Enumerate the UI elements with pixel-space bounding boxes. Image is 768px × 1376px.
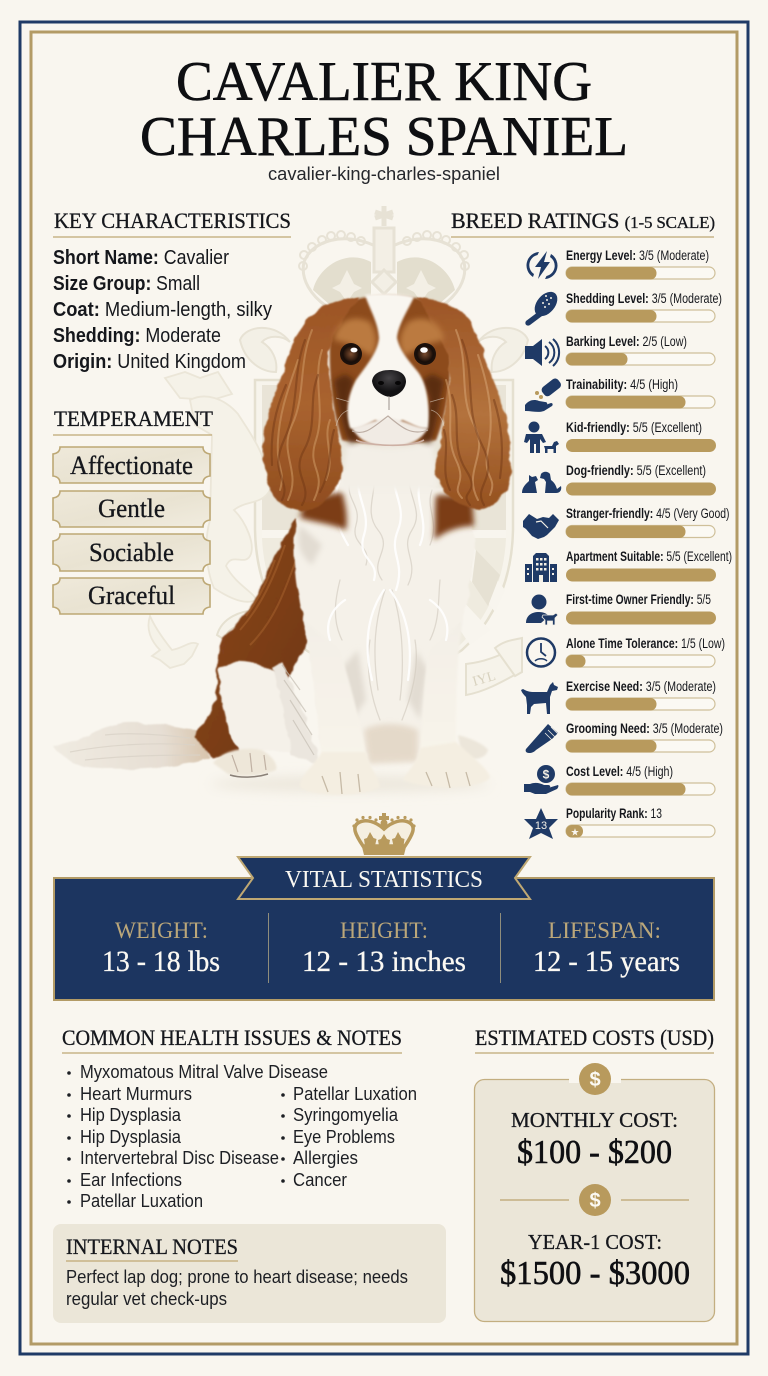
rating: first-time owner friendly: First-time Owner Friendly: 5/5 xyxy=(566,592,711,607)
icon: building xyxy=(525,553,557,582)
crest ribbon xyxy=(217,610,522,695)
panel: vital statistics xyxy=(54,857,714,1000)
plaque: affectionate xyxy=(53,447,210,483)
right rear paw xyxy=(458,735,488,759)
heading: key characteristics: KEY CHARACTERISTICS xyxy=(54,208,291,233)
health issues list: Allergies xyxy=(293,1147,358,1168)
icon: person with dog xyxy=(526,594,558,625)
rating: cost level: Cost Level: 4/5 (High) xyxy=(566,764,673,779)
rating: barking level xyxy=(525,334,715,366)
health issues list: Hip Dysplasia xyxy=(80,1126,182,1147)
health issues list: Cancer xyxy=(293,1169,347,1190)
panel: internal notes: regular vet check-ups xyxy=(66,1288,227,1309)
rating: energy level: Energy Level: 3/5 (Moderate) xyxy=(566,248,709,263)
rating: apartment suitable: Apartment Suitable: 5/5 (Excellent) xyxy=(566,549,732,564)
crest lion xyxy=(148,372,270,668)
key characteristics list xyxy=(53,247,272,373)
icon: star 13: 13 xyxy=(535,820,547,832)
title: CHARLES SPANIEL xyxy=(140,106,628,168)
ribbon banner: VITAL STATISTICS xyxy=(285,867,483,893)
wispy fur beside leg xyxy=(272,662,320,765)
body shading xyxy=(298,525,428,720)
panel: internal notes: INTERNAL NOTES xyxy=(66,1234,238,1259)
icon: star 13 xyxy=(524,808,558,839)
crest ribbon: IYL xyxy=(471,669,498,690)
rating: shedding level: Shedding Level: 3/5 (Moderate) xyxy=(566,291,722,306)
chest and body xyxy=(294,470,474,757)
icon: clock xyxy=(527,638,555,666)
icon: hand with coin xyxy=(524,765,558,794)
icon: treat bottle and hand xyxy=(525,377,563,412)
panel: internal notes xyxy=(53,1224,446,1323)
key characteristics list: Short Name: Cavalier xyxy=(53,247,229,269)
head base xyxy=(330,295,451,444)
coin divider middle xyxy=(500,1184,689,1216)
rating: popularity rank: Popularity Rank: 13 xyxy=(566,806,662,821)
health issues list: Ear Infections xyxy=(80,1169,182,1190)
key characteristics list: Shedding: Moderate xyxy=(53,325,221,347)
icon: child with dog xyxy=(524,422,559,453)
rear paw xyxy=(213,749,276,777)
plaque: gentle: Gentle xyxy=(98,494,165,523)
temperament plaques xyxy=(53,447,210,614)
rating: popularity rank xyxy=(524,806,715,839)
stat: weight: 13 - 18 lbs xyxy=(102,945,220,978)
nose xyxy=(372,370,406,397)
rating: barking level: Barking Level: 2/5 (Low) xyxy=(566,334,687,349)
rating: grooming need: Grooming Need: 3/5 (Moderate) xyxy=(566,721,723,736)
icon: comb xyxy=(526,724,558,753)
dog illustration xyxy=(53,294,511,795)
chin xyxy=(352,418,428,447)
rating: stranger-friendly: Stranger-friendly: 4/5 (Very Good) xyxy=(566,506,730,521)
icon: two dogs xyxy=(522,472,561,493)
year-1 cost: YEAR-1 COST: xyxy=(528,1230,662,1254)
health issues list xyxy=(67,1061,417,1211)
subtitle: cavalier-king-charles-spaniel xyxy=(268,164,500,184)
key characteristics list: Size Group: Small xyxy=(53,273,200,295)
health issues list: Patellar Luxation xyxy=(80,1190,203,1211)
crest flourishes xyxy=(240,328,528,372)
health issues list: Eye Problems xyxy=(293,1126,395,1147)
health issues list: Heart Murmurs xyxy=(80,1083,192,1104)
rating: exercise need xyxy=(521,679,716,714)
dark cheek shadows xyxy=(334,374,444,444)
icon: hand with coin: $ xyxy=(543,768,550,782)
brown back and rear xyxy=(194,518,320,758)
heraldic crest background xyxy=(148,206,528,700)
health issues list: Syringomyelia xyxy=(293,1104,399,1125)
plaque: sociable: Sociable xyxy=(89,538,174,567)
head xyxy=(334,294,444,447)
plaque: gentle xyxy=(53,491,210,527)
rating: cost level xyxy=(524,764,715,796)
white neck xyxy=(340,440,440,490)
rating: trainability xyxy=(525,377,715,412)
heading: breed ratings: BREED RATINGS (1-5 SCALE) xyxy=(451,208,715,233)
left front paw xyxy=(300,752,380,795)
icon: speaker xyxy=(525,339,559,366)
health issues list: Myxomatous Mitral Valve Disease xyxy=(80,1061,328,1082)
white haunch xyxy=(219,662,300,752)
ribbon banner xyxy=(238,857,530,899)
coin divider top: $ xyxy=(589,1069,601,1091)
coin divider middle: $ xyxy=(589,1190,601,1212)
heading: estimated costs: ESTIMATED COSTS (USD) xyxy=(475,1025,714,1050)
rating: energy level xyxy=(527,248,715,280)
stat: height: 12 - 13 inches xyxy=(302,945,466,978)
stat: lifespan: 12 - 15 years xyxy=(533,945,680,978)
heading: temperament: TEMPERAMENT xyxy=(54,406,214,431)
rating: dog-friendly xyxy=(522,463,716,496)
year-1 cost: $1500 - $3000 xyxy=(500,1255,690,1292)
stat: lifespan: LIFESPAN: xyxy=(548,918,661,943)
plaque: affectionate: Affectionate xyxy=(70,451,193,480)
plaque: graceful xyxy=(53,578,210,614)
breed ratings list xyxy=(521,248,732,839)
whiskers xyxy=(336,398,444,426)
left front leg xyxy=(304,620,366,758)
left ear xyxy=(263,297,360,511)
health issues list: Hip Dysplasia xyxy=(80,1104,182,1125)
stat: height xyxy=(302,918,466,978)
plaque: sociable xyxy=(53,534,210,571)
heading: common health issues: COMMON HEALTH ISSUES & NOTES xyxy=(62,1025,402,1050)
right ear xyxy=(417,297,511,510)
icon: handshake xyxy=(523,514,559,539)
rating: trainability: Trainability: 4/5 (High) xyxy=(566,377,678,392)
stat: height: HEIGHT: xyxy=(340,918,428,943)
key characteristics list: Coat: Medium-length, silky xyxy=(53,299,272,321)
ground shadow xyxy=(210,776,490,792)
crest crown xyxy=(299,206,469,306)
title: CAVALIER KING xyxy=(176,51,592,113)
rating: kid-friendly: Kid-friendly: 5/5 (Excellent) xyxy=(566,420,702,435)
rating: apartment suitable xyxy=(525,549,732,582)
brown neck patches xyxy=(300,492,474,540)
monthly cost: $100 - $200 xyxy=(517,1134,672,1171)
panel: estimated costs xyxy=(474,1063,714,1322)
monthly cost xyxy=(511,1108,678,1171)
icon: walking dog xyxy=(521,682,558,714)
icon: gold crown xyxy=(352,813,416,855)
rating: first-time owner friendly xyxy=(526,592,716,625)
stat: weight xyxy=(102,918,220,978)
rating: dog-friendly: Dog-friendly: 5/5 (Excellent) xyxy=(566,463,706,478)
monthly cost: MONTHLY COST: xyxy=(511,1108,678,1132)
icon: lightning bolt xyxy=(527,251,557,279)
rating: kid-friendly xyxy=(524,420,716,453)
icon: brush xyxy=(525,287,562,326)
white blaze and muzzle xyxy=(348,294,429,429)
key characteristics list: Origin: United Kingdom xyxy=(53,351,246,373)
rating: alone time tolerance xyxy=(527,636,725,668)
eyes xyxy=(340,343,436,365)
head brown highlights xyxy=(334,318,444,356)
title xyxy=(140,51,628,168)
stat: lifespan xyxy=(533,918,680,978)
rating: popularity rank: ★ xyxy=(571,828,580,838)
right front leg xyxy=(420,620,463,752)
health issues list: Intervertebral Disc Disease xyxy=(80,1147,279,1168)
year-1 cost xyxy=(500,1230,690,1292)
tail xyxy=(53,722,210,769)
right front paw xyxy=(403,742,490,788)
panel: internal notes: Perfect lap dog; prone to heart disease; needs xyxy=(66,1266,408,1287)
rating: grooming need xyxy=(526,721,723,753)
rating: stranger-friendly xyxy=(523,506,730,539)
plaque: graceful: Graceful xyxy=(88,581,175,610)
belly shadow xyxy=(364,724,418,764)
chest fur xyxy=(328,465,447,720)
coin divider top xyxy=(569,1063,621,1095)
health issues list: Patellar Luxation xyxy=(293,1083,417,1104)
rating: shedding level xyxy=(525,287,722,326)
rating: alone time tolerance: Alone Time Tolerance: 1/5 (Low) xyxy=(566,636,725,651)
stat: weight: WEIGHT: xyxy=(115,918,208,943)
rating: exercise need: Exercise Need: 3/5 (Moderate) xyxy=(566,679,716,694)
crest shield xyxy=(255,380,513,700)
